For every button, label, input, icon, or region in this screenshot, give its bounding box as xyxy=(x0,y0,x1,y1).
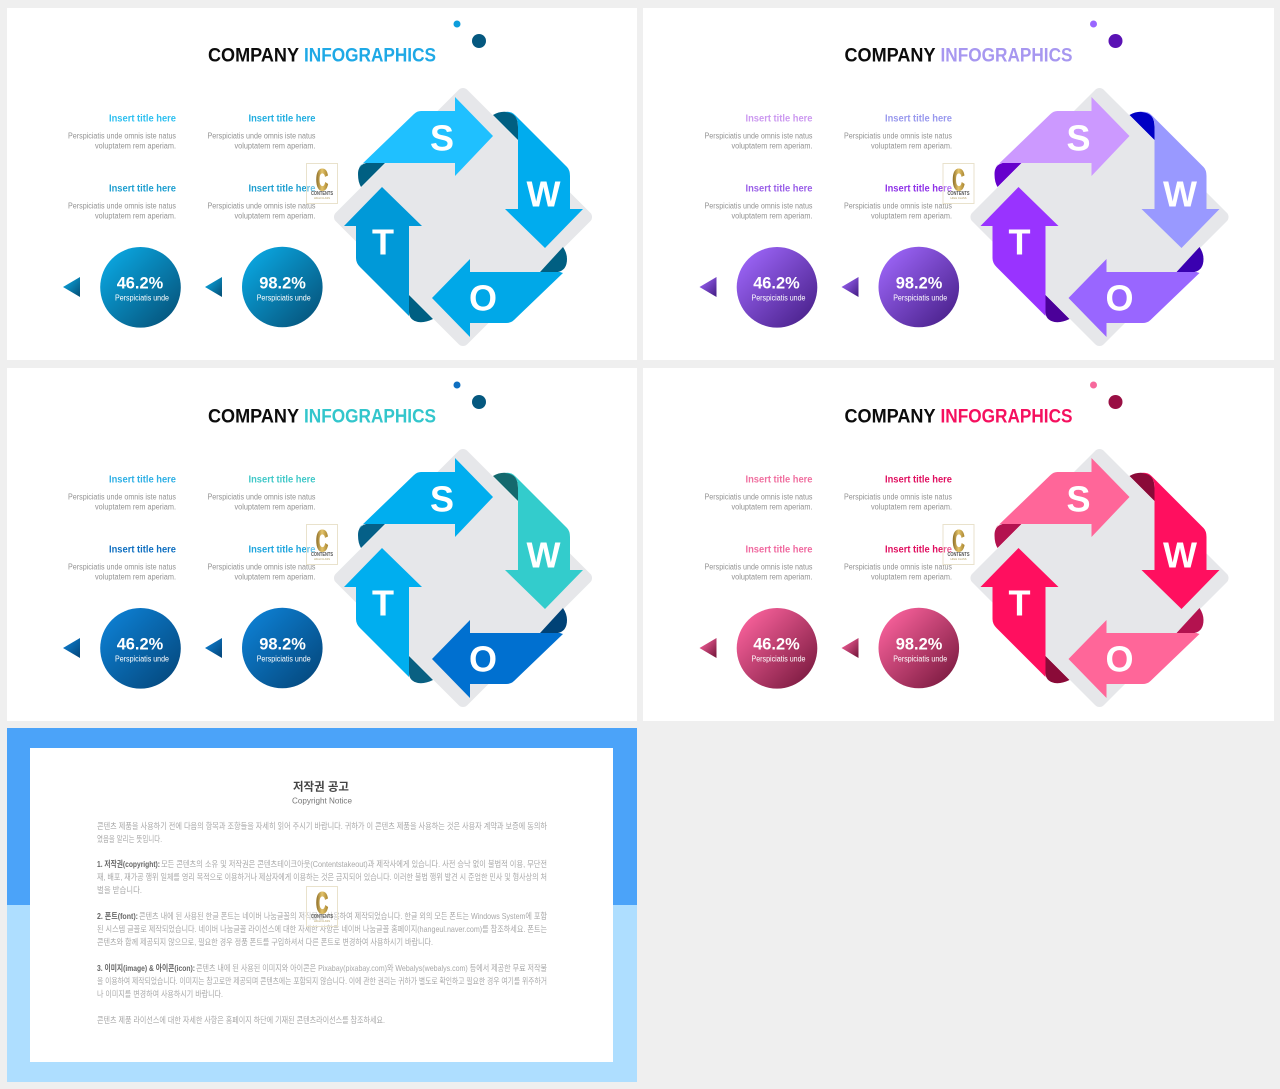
panel: copyright notice xyxy=(7,728,637,1082)
watermark logo: CONTENTS xyxy=(311,191,334,197)
text block: bottom left: Insert title here xyxy=(109,544,176,556)
panel: blue slide xyxy=(7,8,637,360)
title: INFOGRAPHICS xyxy=(304,406,436,428)
decorative dots xyxy=(454,382,486,409)
arrow O xyxy=(432,608,567,698)
text block: bottom right: voluptatem rem aperiam. xyxy=(234,572,316,582)
text block: bottom left: voluptatem rem aperiam. xyxy=(732,572,812,582)
stat circle 46.2%: Perspiciatis unde xyxy=(752,654,806,664)
notice body text: 된 시스템 글꼴로 제작되었습니다. 네이버 나눔글꼴 라이선스에 대한 자세한 사항은 네이버 나눔글꼴 홈페이지(hangeul.naver.com)를 참조하세요. 폰트는 xyxy=(97,924,547,934)
text block: top right xyxy=(208,474,316,512)
SWOT diagram xyxy=(331,85,595,349)
icon: triangle marker right xyxy=(205,277,222,297)
watermark logo: CONTENTS xyxy=(948,552,970,558)
stat circle 46.2%: 46.2% xyxy=(117,274,164,292)
arrow W: W xyxy=(1163,174,1197,214)
notice heading: Copyright Notice xyxy=(292,796,352,806)
stat circle 46.2% xyxy=(737,608,817,689)
stat circle 46.2%: Perspiciatis unde xyxy=(115,654,169,664)
icon: triangle marker left xyxy=(63,638,80,658)
notice body text: 콘텐츠 제품 라이선스에 대한 자세한 사항은 홈페이지 하단에 기재된 콘텐츠라이선스를 참조하세요. xyxy=(97,1015,385,1025)
text block: top left: Perspiciatis unde omnis iste natus xyxy=(704,492,812,502)
icon: triangle marker right xyxy=(842,638,858,658)
decorative dots xyxy=(454,20,486,48)
icon: triangle marker right xyxy=(205,638,222,658)
text block: bottom left: Insert title here xyxy=(746,544,813,556)
text block: top left: Insert title here xyxy=(109,114,176,124)
text block: top right: voluptatem rem aperiam. xyxy=(234,502,316,512)
SWOT diagram xyxy=(331,446,595,710)
watermark logo: C xyxy=(952,525,964,558)
text block: top left: voluptatem rem aperiam. xyxy=(732,502,812,512)
text block: bottom right: voluptatem rem aperiam. xyxy=(234,212,316,220)
text block: top right xyxy=(208,114,316,150)
stat circle 98.2%: 98.2% xyxy=(259,636,306,654)
watermark logo: CONTENTS xyxy=(311,914,334,920)
text block: top left: Perspiciatis unde omnis iste natus xyxy=(68,492,176,502)
text block: bottom right: voluptatem rem aperiam. xyxy=(871,572,952,582)
stat circle 46.2%: Perspiciatis unde xyxy=(115,294,169,302)
text block: top right: Perspiciatis unde omnis iste natus xyxy=(208,492,316,502)
text block: bottom right: Insert title here xyxy=(885,184,952,194)
arrow S xyxy=(994,458,1130,548)
notice body text: 1. 저작권(copyright): xyxy=(97,859,160,869)
stat circle 98.2% xyxy=(878,247,959,327)
title: INFOGRAPHICS xyxy=(304,44,436,66)
stat circle 98.2% xyxy=(242,608,323,688)
notice body text: 콘텐츠 내에 된 사용된 이미지와 아이콘은 Pixabay(pixabay.com)와 Webalys(webalys.com) 등에서 제공한 무료 저작물 xyxy=(196,963,547,973)
notice body text xyxy=(97,821,547,1025)
title xyxy=(208,406,436,428)
stat circle 46.2%: Perspiciatis unde xyxy=(752,294,806,302)
notice body text: 콘텐츠 내에 된 사용된 한글 폰트는 네이버 나눔글꼴의 저작물을 사용하여 제작되었습니다. 한글 외의 모든 폰트는 Windows System에 포함 xyxy=(139,911,547,921)
text block: bottom left: Perspiciatis unde omnis iste natus xyxy=(68,562,176,572)
text block: bottom left: Insert title here xyxy=(746,184,813,194)
watermark logo: HIGH CLASS xyxy=(314,557,330,561)
text block: bottom right: Insert title here xyxy=(885,544,952,556)
stat circle 98.2% xyxy=(242,247,323,327)
arrow T: T xyxy=(1008,582,1030,624)
text block: top left: voluptatem rem aperiam. xyxy=(732,142,812,150)
title: COMPANY xyxy=(844,406,936,428)
text block: bottom left: voluptatem rem aperiam. xyxy=(95,572,176,582)
title xyxy=(844,406,1072,428)
watermark logo: HIGH CLASS xyxy=(950,557,966,561)
text block: top left xyxy=(704,474,813,512)
text block: bottom left: Perspiciatis unde omnis iste natus xyxy=(704,562,812,572)
text block: bottom left xyxy=(704,184,813,220)
stat circle 98.2%: Perspiciatis unde xyxy=(257,654,311,664)
panel: teal-blue slide xyxy=(7,368,637,721)
text block: bottom right: voluptatem rem aperiam. xyxy=(871,212,952,220)
text block: top right: Insert title here xyxy=(248,114,316,124)
arrow T xyxy=(980,187,1070,322)
text block: top right: Perspiciatis unde omnis iste natus xyxy=(844,492,952,502)
arrow O xyxy=(1068,608,1204,698)
icon: triangle marker right xyxy=(842,277,858,297)
text block: bottom left: voluptatem rem aperiam. xyxy=(95,212,176,220)
notice body text: 2. 폰트(font): xyxy=(97,911,138,921)
text block: top left: Perspiciatis unde omnis iste natus xyxy=(68,132,176,140)
arrow T: T xyxy=(1008,222,1030,262)
arrow T: T xyxy=(372,222,394,262)
arrow S: S xyxy=(1066,118,1091,158)
notice body text: 재, 배포, 재가공 행위 일체를 영리 목적으로 이용하거나 제삼자에게 이용하는 것은 금지되어 있습니다. 이러한 불법 행위 발견 시 준엄한 민사 및 형사상의 처 xyxy=(97,872,547,882)
text block: top right: Insert title here xyxy=(885,474,952,486)
watermark logo: HIGH CLASS xyxy=(950,196,966,200)
stat circle 98.2%: Perspiciatis unde xyxy=(893,654,947,664)
watermark logo: C xyxy=(316,164,328,197)
text block: top right: voluptatem rem aperiam. xyxy=(871,142,952,150)
text block: top left xyxy=(68,474,176,512)
notice body text: 콘텐츠 제품을 사용하기 전에 다음의 항목과 조항들을 자세히 읽어 주시기 바랍니다. 귀하가 이 콘텐츠 제품을 사용하는 것은 사용자 계약과 보증에 동의하 xyxy=(97,821,547,831)
stat circle 98.2%: 98.2% xyxy=(896,636,943,654)
stat circle 98.2%: 98.2% xyxy=(896,274,943,292)
arrow T xyxy=(344,187,433,322)
notice body text: 모든 콘텐츠의 소유 및 저작권은 콘텐츠테이크아웃(Contentstakeout)과 제작사에게 있습니다. 사전 승낙 없이 불법적 이용, 무단전 xyxy=(161,859,547,869)
stat circle 46.2%: 46.2% xyxy=(753,274,800,292)
notice body text: 을 이용하여 제작되었습니다. 이미지는 참고로만 제공되며 콘텐츠에는 포함되지 않습니다. 이에 관한 권리는 귀하가 별도로 확인하고 필요한 경우 여기를 위주하거 xyxy=(97,976,547,986)
text block: top right: Insert title here xyxy=(885,114,952,124)
arrow W xyxy=(1130,473,1220,609)
arrow S xyxy=(358,97,493,187)
text block: top left: Insert title here xyxy=(746,474,813,486)
icon: triangle marker left xyxy=(700,277,716,297)
title: COMPANY xyxy=(844,44,936,66)
arrow S: S xyxy=(1066,478,1091,520)
text block: bottom right: Perspiciatis unde omnis iste natus xyxy=(208,202,316,210)
arrow W xyxy=(1130,112,1220,248)
watermark logo: CONTENTS xyxy=(311,552,334,558)
text block: top left: voluptatem rem aperiam. xyxy=(95,142,176,150)
arrow S xyxy=(358,458,493,548)
text block: top right: voluptatem rem aperiam. xyxy=(871,502,952,512)
text block: bottom right: Insert title here xyxy=(248,184,316,194)
notice heading: 저작권 공고 xyxy=(293,780,349,794)
watermark logo xyxy=(306,164,338,204)
watermark logo: HIGH CLASS xyxy=(314,196,330,200)
decorative dots xyxy=(1090,20,1122,48)
text block: bottom right: Perspiciatis unde omnis iste natus xyxy=(844,562,952,572)
text block: bottom right: Perspiciatis unde omnis iste natus xyxy=(208,562,316,572)
text block: bottom right xyxy=(844,184,952,220)
text block: bottom right: Insert title here xyxy=(248,544,316,556)
notice body text: 콘텐츠와 함께 제공되지 않으므로, 필요한 경우 정품 폰트를 구입하셔서 다른 폰트로 변경하여 사용하시기 바랍니다. xyxy=(97,937,433,947)
text block: top left: voluptatem rem aperiam. xyxy=(95,502,176,512)
text block: top left xyxy=(704,114,813,150)
decorative dots xyxy=(1090,382,1122,409)
stat circle 98.2%: Perspiciatis unde xyxy=(893,294,947,302)
text block: bottom left xyxy=(68,544,176,582)
arrow S xyxy=(994,97,1130,187)
text block: bottom left xyxy=(704,544,813,582)
notice heading xyxy=(292,780,352,806)
watermark logo xyxy=(306,886,338,926)
text block: bottom right xyxy=(844,544,952,582)
title xyxy=(844,44,1072,66)
arrow W xyxy=(493,112,583,248)
watermark logo: CONTENTS xyxy=(948,191,970,197)
text block: bottom left: Perspiciatis unde omnis iste natus xyxy=(704,202,812,210)
text block: bottom left xyxy=(68,184,176,220)
arrow W xyxy=(493,473,583,609)
text block: bottom left: Insert title here xyxy=(109,184,176,194)
SWOT diagram xyxy=(968,446,1231,710)
watermark logo: C xyxy=(316,887,328,920)
watermark logo: C xyxy=(952,164,964,197)
notice body text: 벌을 받습니다. xyxy=(97,885,142,895)
arrow S: S xyxy=(430,118,454,158)
stat circle 46.2% xyxy=(737,247,817,328)
title: INFOGRAPHICS xyxy=(940,44,1072,66)
text block: bottom right xyxy=(208,184,316,220)
text block: top right xyxy=(844,474,952,512)
watermark logo: C xyxy=(316,525,328,558)
watermark logo xyxy=(306,524,338,564)
arrow T xyxy=(980,548,1070,683)
title: COMPANY xyxy=(208,406,299,428)
text block: top left: Insert title here xyxy=(746,114,813,124)
SWOT diagram xyxy=(968,85,1231,349)
stat circle 98.2%: Perspiciatis unde xyxy=(257,294,311,302)
title: INFOGRAPHICS xyxy=(940,406,1072,428)
text block: top right: Perspiciatis unde omnis iste natus xyxy=(208,132,316,140)
arrow O: O xyxy=(469,638,497,680)
watermark logo xyxy=(943,164,974,204)
stat circle 46.2%: 46.2% xyxy=(117,636,164,654)
arrow O xyxy=(432,247,567,337)
text block: top left xyxy=(68,114,176,150)
title xyxy=(208,44,436,66)
arrow W: W xyxy=(527,174,561,214)
text block: top right xyxy=(844,114,952,150)
arrow W: W xyxy=(527,534,561,576)
notice body text: 3. 이미지(image) & 아이콘(icon): xyxy=(97,963,195,973)
text block: bottom left: voluptatem rem aperiam. xyxy=(732,212,812,220)
arrow T xyxy=(344,548,433,683)
icon: triangle marker left xyxy=(700,638,716,658)
text block: top left: Insert title here xyxy=(109,474,176,486)
watermark logo: HIGH CLASS xyxy=(314,919,330,923)
text block: bottom right xyxy=(208,544,316,582)
arrow W: W xyxy=(1163,534,1197,576)
icon: triangle marker left xyxy=(63,277,80,297)
panel: pink slide xyxy=(643,368,1274,721)
text block: bottom right: Perspiciatis unde omnis iste natus xyxy=(844,202,952,210)
arrow O: O xyxy=(469,278,497,318)
arrow O: O xyxy=(1105,638,1134,680)
notice body text: 였음을 알리는 뜻입니다. xyxy=(97,834,162,844)
text block: top left: Perspiciatis unde omnis iste natus xyxy=(704,132,812,140)
stat circle 46.2%: 46.2% xyxy=(753,636,800,654)
stat circle 46.2% xyxy=(100,247,181,328)
text block: top right: Perspiciatis unde omnis iste natus xyxy=(844,132,952,140)
notice body text: 나 이미지를 변경하여 사용하시기 바랍니다. xyxy=(97,989,223,999)
stat circle 98.2%: 98.2% xyxy=(259,274,306,292)
text block: top right: Insert title here xyxy=(248,474,316,486)
arrow S: S xyxy=(430,478,454,520)
watermark logo xyxy=(943,524,974,564)
arrow O: O xyxy=(1105,278,1134,318)
title: COMPANY xyxy=(208,44,299,66)
panel: purple slide xyxy=(643,8,1274,360)
arrow O xyxy=(1068,247,1204,337)
text block: top right: voluptatem rem aperiam. xyxy=(234,142,316,150)
arrow T: T xyxy=(372,582,394,624)
stat circle 46.2% xyxy=(100,608,181,689)
stat circle 98.2% xyxy=(878,608,959,688)
text block: bottom left: Perspiciatis unde omnis iste natus xyxy=(68,202,176,210)
